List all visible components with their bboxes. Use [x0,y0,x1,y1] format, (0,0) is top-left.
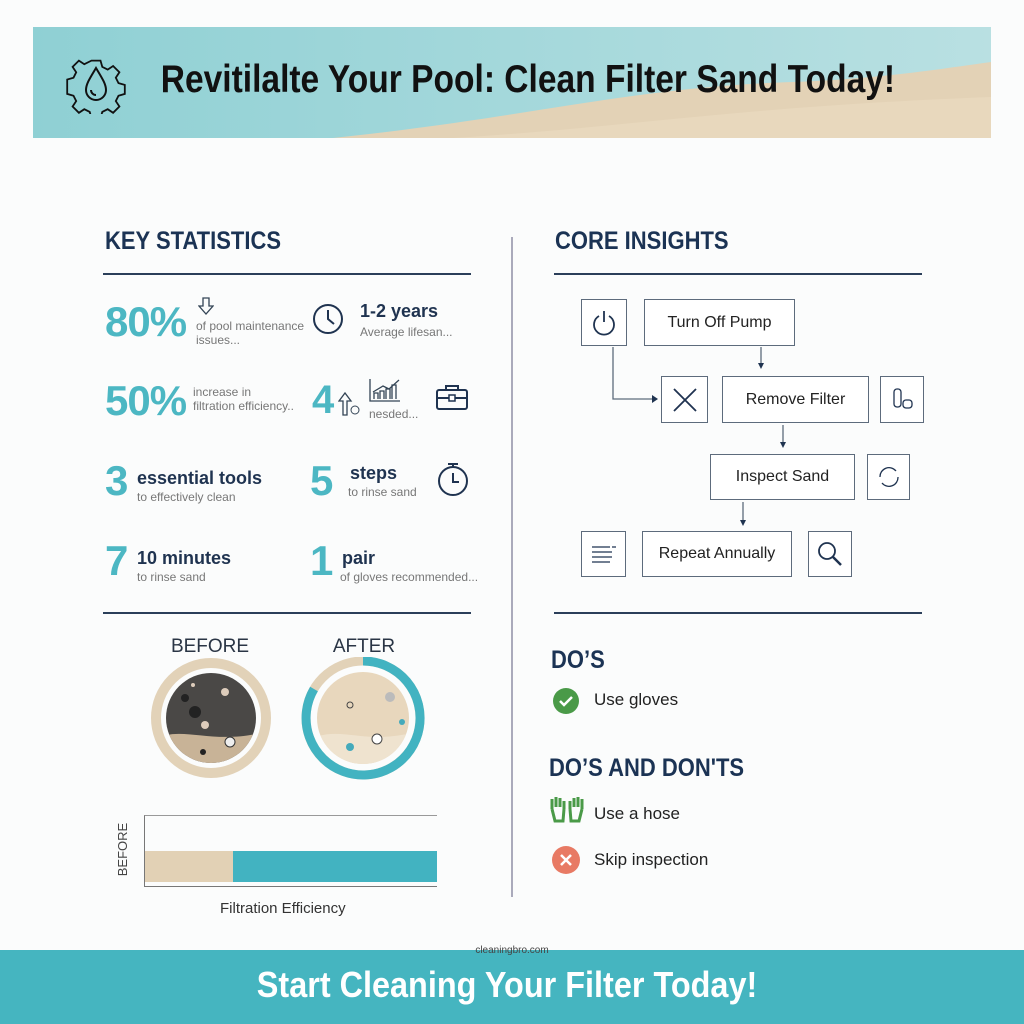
stat 3: essential tools [137,468,262,488]
panel: do's and don'ts: Skip inspection [594,850,708,869]
flowchart [581,299,924,577]
stat 1 [310,537,478,584]
stat 5: 5 [310,457,332,504]
flowchart: Repeat Annually [659,545,775,562]
step: inspect sand [710,454,855,500]
heading: KEY STATISTICS [105,227,281,255]
stat 7: 10 minutes [137,548,231,568]
stat 1-2 years: Average lifesan... [360,325,453,339]
panel: do's and don'ts: DO’S AND DON'TS [549,754,744,782]
step: inspect sand: Inspect Sand [736,468,829,485]
before/after comparison: BEFORE [171,636,249,657]
panel: do's: Use gloves [594,690,678,709]
stat 80%: 80% [105,298,186,345]
bar chart: filtration efficiency: BEFORE [115,823,130,876]
stat 4 [312,378,468,422]
step: repeat annually [581,531,626,577]
stat 5 [310,457,468,504]
stat 5: to rinse sand [348,485,417,499]
header banner [33,27,991,138]
icon: check [553,688,579,714]
icon: x [552,846,580,874]
stat 80%: of pool maintenance [196,319,304,333]
panel: do's: DO’S [551,646,605,674]
stat 7 [105,537,231,584]
footer [0,950,1024,1024]
stat 80% [105,297,304,347]
footer: Start Cleaning Your Filter Today! [257,964,757,1005]
stat 50%: 50% [105,377,186,424]
bar chart: filtration efficiency: Filtration Efficiency [220,900,346,917]
stat 3: 3 [105,457,127,504]
panel: do's and don'ts [549,754,744,874]
stat 3: to effectively clean [137,490,236,504]
stat 1-2 years: 1-2 years [360,301,438,321]
panel: do's and don'ts: Use a hose [594,804,680,823]
icon: gloves [550,797,584,822]
stat 50%: increase in [193,385,251,399]
stat 4: 4 [312,378,333,422]
panel: key statistics [103,227,478,584]
stat 1: pair [342,548,375,568]
panel: core insights: CORE INSIGHTS [555,227,729,255]
bar chart: filtration efficiency [115,815,437,917]
before/after comparison: AFTER [333,636,395,657]
panel: do's [551,646,678,714]
step: remove filter [661,376,708,423]
stat 3 [105,457,262,504]
flowchart: Remove Filter [746,390,845,408]
footer: cleaningbro.com [475,945,549,956]
before/after comparison [151,636,425,780]
icon: gear with drop [66,60,126,114]
title: Revitilalte Your Pool: Clean Filter Sand Today! [161,58,895,101]
stat 1: 1 [310,537,332,584]
stat 4: nesded... [369,407,418,421]
stat 80%: issues... [196,333,240,347]
flowchart: Turn Off Pump [667,314,772,330]
step: turn off pump [581,299,627,346]
stat 7: to rinse sand [137,570,206,584]
stat 7: 7 [105,537,127,584]
stat 5: steps [350,463,397,483]
stat 1-2 years [313,301,453,339]
stat 50% [105,377,294,424]
stat 1: of gloves recommended... [340,570,478,584]
stat 50%: filtration efficiency.. [193,399,294,413]
divider [511,237,512,897]
